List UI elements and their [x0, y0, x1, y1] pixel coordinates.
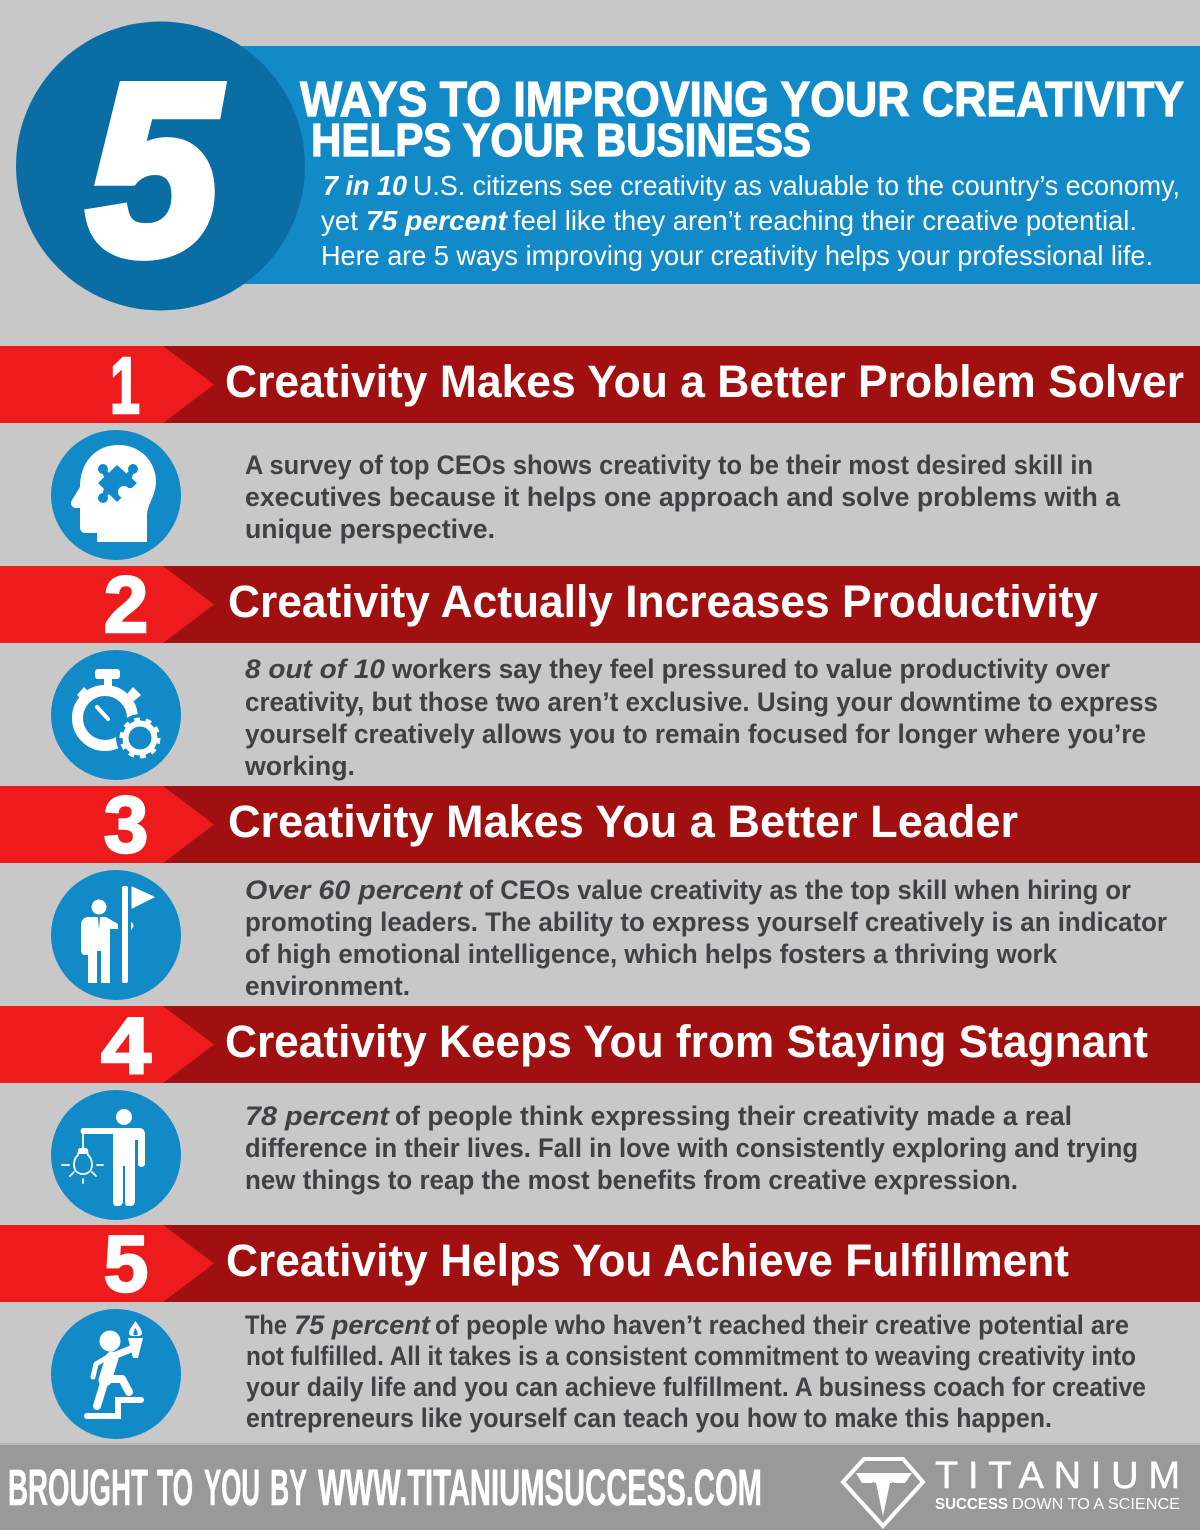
section 5 text: entrepreneurs like yourself can teach you how to make this happen. [246, 1403, 1052, 1433]
section 2 text [244, 654, 1158, 781]
section 4 text: of people think expressing their creativity made a real [395, 1101, 1072, 1131]
intro paragraph [321, 170, 1180, 271]
section 5 text: 75 percent [294, 1310, 431, 1340]
section 3 header bar: Creativity Makes You a Better Leader [228, 796, 1018, 847]
section 2 text: yourself creatively allows you to remain focused for longer where you’re [245, 719, 1146, 749]
logo wordmark: TITANIUM [935, 1455, 1180, 1497]
section 4 header bar [0, 1001, 1200, 1090]
section 5 header bar: Creativity Helps You Achieve Fulfillment [226, 1235, 1069, 1286]
section 2 header bar: 2 [104, 560, 148, 649]
footer credit text: YOU [204, 1459, 260, 1516]
section 3 text: of CEOs value creativity as the top skill when hiring or [469, 875, 1131, 905]
section 5 text: of people who haven’t reached their creative potential are [435, 1310, 1129, 1340]
intro paragraph: U.S. citizens see creativity as valuable to the country’s economy, [413, 170, 1180, 201]
section 3 text: promoting leaders. The ability to express yourself creatively is an indicator [245, 907, 1167, 937]
section 4 header bar: Creativity Keeps You from Staying Stagnant [225, 1016, 1148, 1067]
section 4 text: 78 percent [245, 1101, 390, 1131]
logo wordmark: DOWN TO A SCIENCE [1012, 1496, 1180, 1513]
section 1 text: executives because it helps one approach and solve problems with a [245, 482, 1121, 512]
section 2 text: workers say they feel pressured to value productivity over [391, 654, 1110, 684]
big number circle: 5 [88, 35, 221, 305]
footer credit text: TO [157, 1459, 193, 1516]
big number circle [16, 22, 305, 310]
footer credit text: WWW.TITANIUMSUCCESS.COM [318, 1459, 762, 1516]
section 2 text: working. [244, 751, 355, 781]
section 2 text: 8 out of 10 [245, 654, 385, 684]
section 5 header bar [0, 1219, 1200, 1308]
section 1 header bar: Creativity Makes You a Better Problem Solver [225, 356, 1184, 407]
title: HELPS YOUR BUSINESS [311, 114, 811, 166]
section 2 header bar [0, 560, 1200, 649]
title [300, 73, 1184, 166]
section 1 text [245, 450, 1121, 544]
section 5 text: your daily life and you can achieve fulfillment. A business coach for creative [246, 1372, 1146, 1402]
section 3 text: environment. [245, 971, 410, 1001]
section 4 text [245, 1101, 1138, 1195]
icon: stopwatch and gear [51, 650, 181, 780]
icon: leader with flag [51, 870, 181, 1000]
section 5 header bar: 5 [104, 1219, 148, 1308]
intro paragraph: Here are 5 ways improving your creativity helps your professional life. [321, 240, 1153, 271]
section 3 text: of high emotional intelligence, which helps fosters a thriving work [245, 939, 1058, 969]
header banner [16, 22, 1200, 310]
section 5 text: The [245, 1310, 287, 1340]
icon: person climbing stairs with torch [51, 1309, 181, 1439]
logo wordmark: SUCCESS [935, 1496, 1008, 1513]
footer credit text [8, 1459, 762, 1516]
section 5 text [245, 1310, 1146, 1433]
footer band [0, 1443, 1200, 1530]
footer credit text: BY [270, 1459, 307, 1516]
section 1 header bar: 1 [110, 341, 140, 430]
intro paragraph: yet [321, 205, 358, 236]
section 4 header bar: 4 [101, 1001, 152, 1090]
section 2 text: creativity, but those two aren’t exclusive. Using your downtime to express [245, 687, 1158, 717]
section 2 header bar: Creativity Actually Increases Productivity [228, 576, 1098, 627]
section 1 text: unique perspective. [245, 514, 495, 544]
section 3 text [245, 875, 1167, 1001]
icon: person holding light bulb [51, 1090, 181, 1220]
logo diamond [843, 1459, 923, 1526]
section 3 text: Over 60 percent [245, 875, 463, 905]
intro paragraph: feel like they aren’t reaching their creative potential. [513, 205, 1137, 236]
section 3 header bar [0, 780, 1200, 869]
section 3 header bar: 3 [104, 780, 148, 869]
section 1 header bar [0, 341, 1200, 430]
intro paragraph: 75 percent [366, 205, 509, 236]
icon: head with puzzle piece [51, 430, 181, 560]
section 4 text: difference in their lives. Fall in love with consistently exploring and trying [245, 1133, 1138, 1163]
footer credit text: BROUGHT [8, 1459, 148, 1516]
section 1 text: A survey of top CEOs shows creativity to be their most desired skill in [245, 450, 1093, 480]
section 4 text: new things to reap the most benefits from creative expression. [245, 1165, 1018, 1195]
intro paragraph: 7 in 10 [323, 170, 407, 201]
